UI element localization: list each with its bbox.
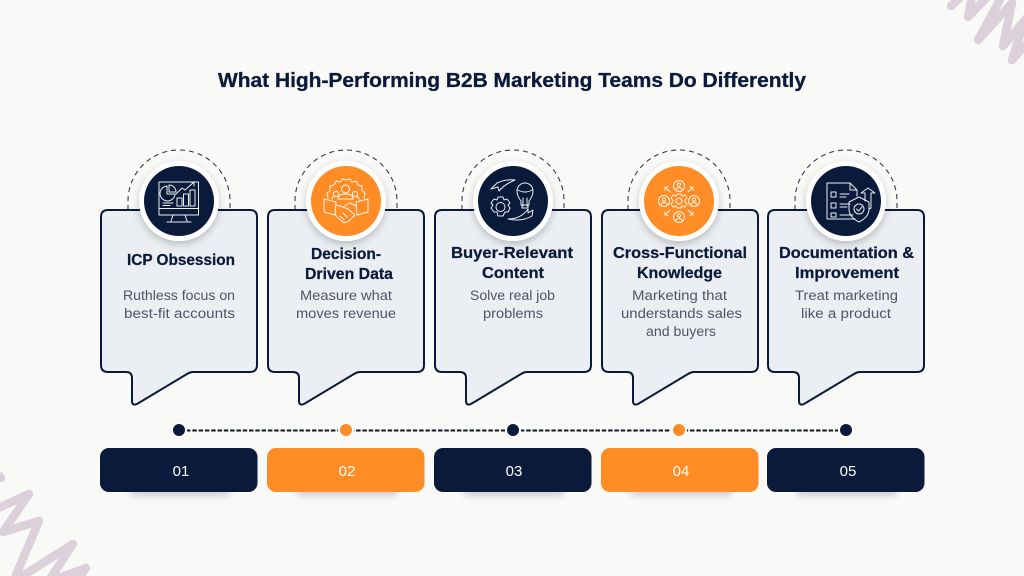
description: problems xyxy=(483,306,543,321)
step 05 xyxy=(767,448,924,496)
heading: Buyer-Relevant xyxy=(451,245,573,262)
description: moves revenue xyxy=(296,306,396,321)
heading: Documentation & xyxy=(779,245,914,262)
step 04 xyxy=(601,448,758,496)
description: Measure what xyxy=(300,288,392,303)
heading xyxy=(451,245,573,282)
description: understands sales xyxy=(621,306,742,321)
step 05: 05 xyxy=(840,463,856,480)
timeline xyxy=(171,422,854,438)
card 2: Decision-Driven Data xyxy=(268,150,424,405)
heading xyxy=(779,245,914,282)
step 02 xyxy=(267,448,424,496)
step 03: 03 xyxy=(506,463,522,480)
heading xyxy=(305,246,393,283)
description: like a product xyxy=(801,306,891,321)
icon: network of people around gear xyxy=(639,161,719,241)
icon: analytics monitor xyxy=(139,161,219,241)
card 3: Buyer-Relevant Content xyxy=(435,150,591,405)
card 1: ICP Obsession xyxy=(101,150,257,405)
step 01: 01 xyxy=(173,463,189,480)
description: Treat marketing xyxy=(795,288,898,303)
description xyxy=(296,288,396,321)
heading: Cross-Functional xyxy=(613,245,747,262)
step 02: 02 xyxy=(339,463,355,480)
heading: Improvement xyxy=(795,265,899,282)
heading: ICP Obsession xyxy=(127,252,235,269)
description: and buyers xyxy=(646,324,716,339)
heading: Driven Data xyxy=(305,266,393,283)
heading xyxy=(613,245,747,282)
description xyxy=(795,288,898,321)
description xyxy=(123,288,235,321)
decorative squiggle: top right xyxy=(951,0,1024,60)
description: Marketing that xyxy=(632,288,727,303)
description: best-fit accounts xyxy=(124,306,235,321)
step 01 xyxy=(100,448,258,496)
step 04: 04 xyxy=(673,463,689,480)
description: Solve real job xyxy=(470,288,555,303)
heading: Knowledge xyxy=(637,265,722,282)
icon: checklist, shield and arrow xyxy=(806,161,886,241)
decorative squiggle: bottom left xyxy=(0,474,86,576)
icon: gear, bulb and cycle arrows xyxy=(473,161,553,241)
step 03 xyxy=(434,448,592,496)
description: Ruthless focus on xyxy=(123,288,235,303)
card 4: Cross-Functional Knowledge xyxy=(602,150,758,405)
icon: team and handshake xyxy=(306,161,386,241)
description xyxy=(470,288,555,321)
description xyxy=(621,288,742,339)
card 5: Documentation & Improvement xyxy=(768,150,924,405)
heading: Content xyxy=(482,265,544,282)
title: What High-Performing B2B Marketing Teams Do Differently xyxy=(218,70,807,92)
heading: Decision- xyxy=(311,246,381,263)
